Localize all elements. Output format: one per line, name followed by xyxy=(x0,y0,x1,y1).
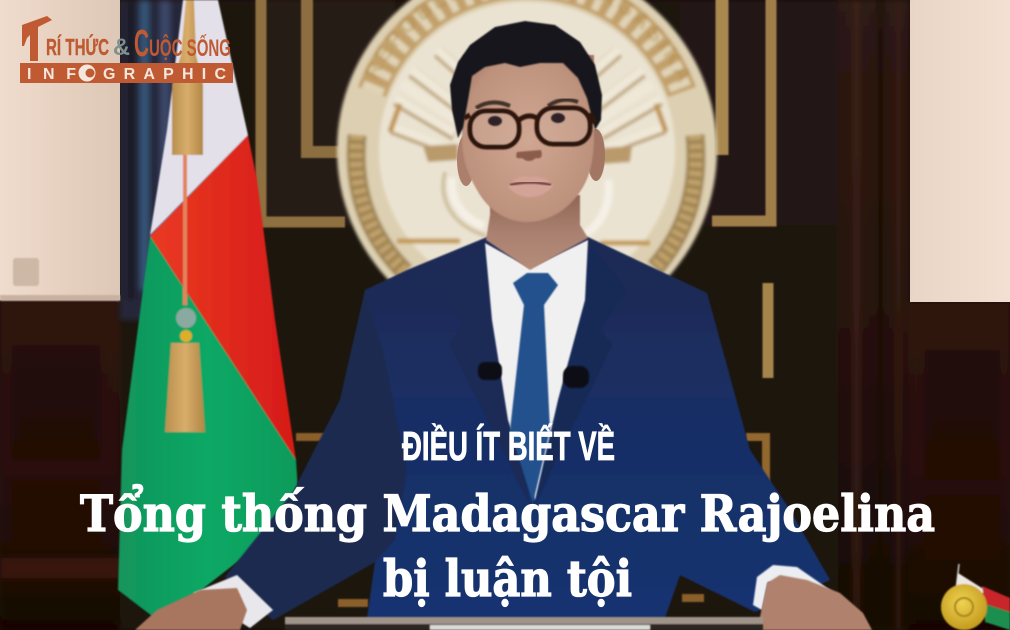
ears xyxy=(457,134,475,186)
door panels with gold trim xyxy=(261,0,771,603)
logo icon: T roof xyxy=(22,16,52,61)
walls: left and right beige panels xyxy=(0,0,1010,302)
left hand xyxy=(135,588,247,630)
flag of Madagascar xyxy=(118,0,298,622)
glasses xyxy=(464,108,595,147)
face xyxy=(462,55,594,222)
flag: lower tassel xyxy=(165,343,205,432)
flag: cord xyxy=(183,155,187,305)
tie xyxy=(510,273,558,503)
right hand xyxy=(760,575,872,630)
emblem: ray fan xyxy=(390,50,666,152)
shirt xyxy=(485,240,588,500)
logo: Tri Thuc & Cuoc Song Infographic: & xyxy=(113,34,130,61)
title xyxy=(80,483,935,608)
lapel microphones xyxy=(478,362,589,388)
logo: Tri Thuc & Cuoc Song Infographic: INF xyxy=(27,66,76,83)
left sleeve xyxy=(225,292,407,620)
flag: upper tassel xyxy=(172,0,203,155)
logo: Tri Thuc & Cuoc Song Infographic xyxy=(20,16,233,83)
hair xyxy=(450,21,602,138)
emblem: rim lettering band xyxy=(372,0,682,92)
podium xyxy=(285,617,763,630)
curtain behind the flag xyxy=(120,0,195,320)
emblem: left wreath xyxy=(356,135,405,272)
flag: green stripe xyxy=(118,236,298,622)
eyes xyxy=(488,113,565,126)
mouth xyxy=(508,176,553,197)
logo: Tri Thuc & Cuoc Song Infographic: GRAPHIC xyxy=(103,66,226,83)
emblem: bars beside the head xyxy=(423,144,632,164)
logo: Tri Thuc & Cuoc Song Infographic: C xyxy=(134,23,149,65)
flag: red stripe xyxy=(150,135,296,460)
neck xyxy=(486,195,588,270)
suit jacket and arms xyxy=(225,237,830,620)
medal emblem with small flag xyxy=(941,564,1010,630)
emblem: right wreath xyxy=(655,135,696,268)
logo: wordmark: RÍ THỨC xyxy=(46,33,109,60)
right cuff xyxy=(753,565,833,610)
flag: white stripe xyxy=(150,0,248,235)
emblem: inner map relief xyxy=(443,172,486,236)
logo: Tri Thuc & Cuoc Song Infographic: UỘC SỐNG xyxy=(149,34,231,62)
eyebrows xyxy=(476,100,578,108)
microphone right xyxy=(563,366,589,388)
left cuff xyxy=(193,575,273,628)
president figure xyxy=(135,21,872,630)
lapel shading xyxy=(445,245,530,505)
subtitle: ĐIỀU ÍT BIẾT VỀ xyxy=(402,423,615,469)
title: bị luận tội xyxy=(383,549,632,608)
nose xyxy=(516,150,542,161)
emblem of Madagascar xyxy=(334,0,720,280)
logo: infographic banner xyxy=(20,63,233,83)
microphone left xyxy=(478,362,502,380)
flag: bead xyxy=(176,308,196,328)
